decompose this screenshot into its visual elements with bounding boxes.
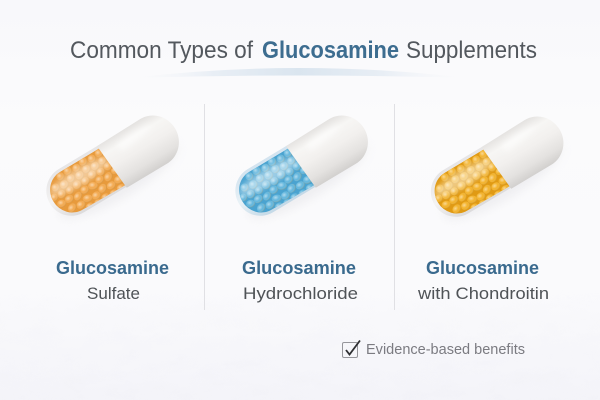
- label: with chondroitin: Glucosamine: [426, 258, 539, 278]
- title: [70, 37, 537, 64]
- label: with chondroitin: [417, 258, 549, 303]
- icon: capsule, hydrochloride: [226, 106, 378, 230]
- label: hydrochloride: Glucosamine: [242, 258, 356, 278]
- label: hydrochloride: [242, 258, 358, 303]
- title: Glucosamine: [262, 37, 399, 64]
- label: sulfate: [56, 258, 169, 303]
- icon: capsule, sulfate: [37, 106, 189, 230]
- title: Supplements: [406, 37, 537, 64]
- evidence note: Evidence-based benefits: [366, 342, 525, 358]
- label: hydrochloride: Hydrochloride: [243, 284, 358, 303]
- icon: checkbox: [342, 340, 360, 358]
- label: sulfate: Glucosamine: [56, 258, 169, 278]
- label: with chondroitin: with Chondroitin: [417, 284, 549, 303]
- label: sulfate: Sulfate: [87, 284, 140, 303]
- title underline swoosh: [130, 68, 467, 78]
- icon: capsule, chondroitin: [421, 107, 574, 231]
- title: Common Types of: [70, 37, 253, 64]
- column dividers: [204, 104, 394, 310]
